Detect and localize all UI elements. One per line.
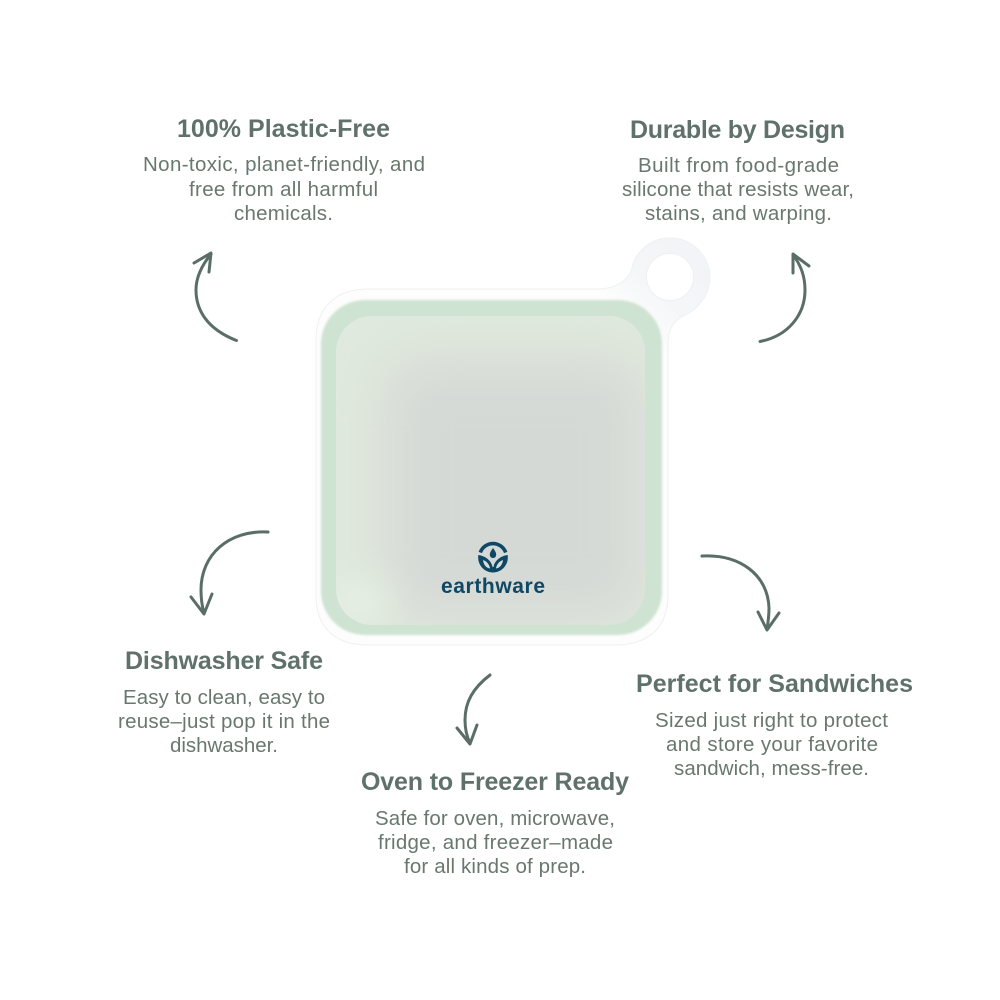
earthware logo bbox=[441, 544, 545, 598]
wordmark: earthware bbox=[441, 575, 545, 598]
description: and store your favorite bbox=[666, 733, 878, 756]
container outer white rim with loop handle bbox=[316, 238, 710, 645]
feature: Durable by Design bbox=[622, 116, 854, 225]
product: silicone container bbox=[316, 238, 710, 645]
arrow: to Perfect for Sandwiches bbox=[702, 556, 779, 630]
description: free from all harmful bbox=[189, 178, 378, 201]
feature: Dishwasher Safe bbox=[118, 647, 330, 757]
arrow: to Oven to Freezer Ready bbox=[457, 675, 490, 744]
description bbox=[375, 807, 615, 878]
heading: Durable by Design bbox=[630, 116, 845, 144]
container green band bbox=[321, 300, 662, 635]
arrow: to Dishwasher Safe bbox=[191, 532, 268, 614]
icon: earthware emblem bbox=[478, 544, 508, 572]
description: Easy to clean, easy to bbox=[123, 686, 325, 709]
description: for all kinds of prep. bbox=[404, 855, 586, 878]
arrow: to Durable by Design bbox=[760, 254, 809, 342]
feature: 100% Plastic-Free bbox=[143, 115, 425, 225]
description: dishwasher. bbox=[170, 734, 278, 757]
description: Safe for oven, microwave, bbox=[375, 807, 615, 830]
description: stains, and warping. bbox=[645, 202, 832, 225]
description: Built from food-grade bbox=[638, 154, 839, 177]
arrow: to 100% Plastic-Free bbox=[194, 253, 236, 340]
feature: Perfect for Sandwiches bbox=[636, 670, 913, 780]
description: sandwich, mess-free. bbox=[674, 757, 869, 780]
description: fridge, and freezer–made bbox=[378, 831, 613, 854]
heading: Dishwasher Safe bbox=[125, 647, 323, 675]
heading: Perfect for Sandwiches bbox=[636, 670, 913, 698]
description: silicone that resists wear, bbox=[622, 178, 854, 201]
description bbox=[622, 154, 854, 225]
heading: 100% Plastic-Free bbox=[177, 115, 390, 143]
description bbox=[118, 686, 330, 757]
description: reuse–just pop it in the bbox=[118, 710, 330, 733]
description: Sized just right to protect bbox=[655, 709, 888, 732]
container inner base bbox=[336, 316, 645, 625]
feature: Oven to Freezer Ready bbox=[361, 768, 629, 878]
description bbox=[143, 153, 425, 225]
description: chemicals. bbox=[234, 202, 333, 225]
description bbox=[655, 709, 888, 780]
heading: Oven to Freezer Ready bbox=[361, 768, 629, 796]
description: Non-toxic, planet-friendly, and bbox=[143, 153, 425, 176]
